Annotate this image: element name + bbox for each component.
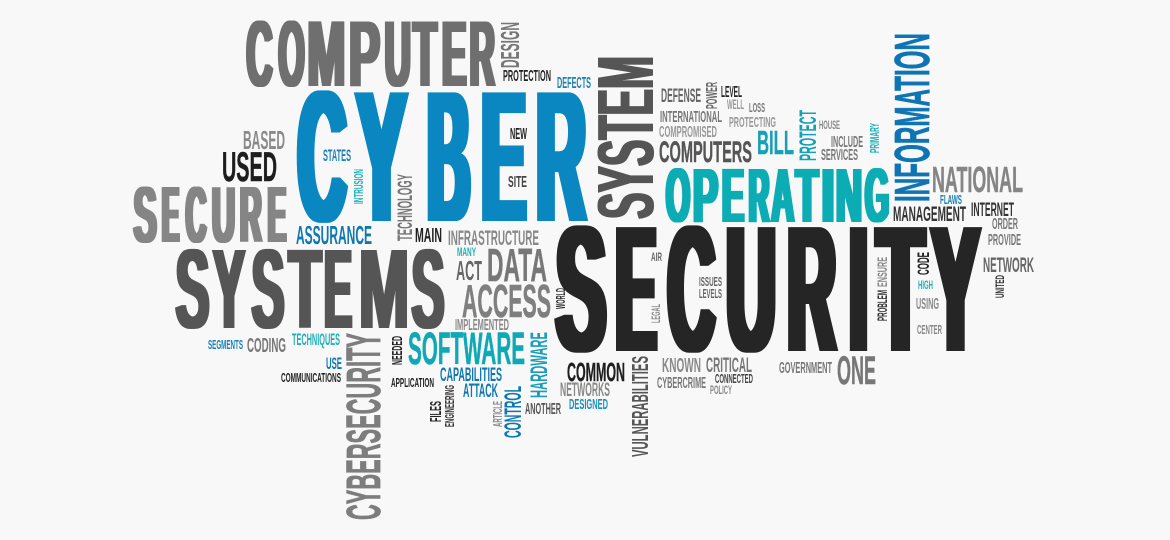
word: HIGH: HIGH: [918, 278, 933, 292]
word cloud: cyber security: PROVIDE: [988, 232, 1021, 249]
word cloud: cyber security: ATTACK: [463, 381, 498, 402]
word cloud: cyber security: INTERNET: [971, 200, 1014, 221]
word cloud: cyber security: LEGAL: [649, 304, 663, 323]
word: SECURE: R: [240, 170, 262, 259]
word: COMPUTER: T: [413, 1, 437, 106]
word: OPERATING: R: [749, 153, 769, 239]
word: SECURITY: T: [877, 189, 924, 390]
word cloud: cyber security: MANAGEMENT: [893, 203, 966, 226]
word cloud: cyber security: INTERNATIONAL: [660, 109, 722, 126]
word cloud: cyber security: CAPABILITIES: [440, 365, 502, 386]
word cloud: cyber security: NETWORK: [983, 254, 1034, 277]
word: SYSTEMS: T: [288, 226, 322, 352]
word cloud: cyber security: NATIONAL: [932, 159, 1023, 200]
word cloud: cyber security: INCLUDE: [831, 134, 863, 151]
word: OPERATING: T: [796, 153, 818, 239]
word cloud: cyber security: BASED: [243, 125, 285, 155]
word cloud: cyber security: COMMUNICATIONS: [281, 370, 341, 385]
word cloud: cyber security: POLICY: [710, 383, 732, 397]
word cloud: cyber security: STATES: [323, 146, 351, 165]
word cloud: cyber security: INFRASTRUCTURE: [448, 227, 539, 250]
word cloud: cyber security: APPLICATION: [391, 375, 434, 390]
word cloud: cyber security: INTRUSION: [351, 169, 366, 204]
word cloud: cyber security: ASSURANCE: [296, 220, 372, 250]
word: SYSTEMS: S: [176, 226, 210, 352]
word: BILL: BILL: [757, 124, 794, 161]
word: CYBER: B: [428, 52, 470, 261]
word cloud: cyber security: R: [537, 52, 586, 261]
word cloud: cyber security: DEFECTS: [557, 75, 591, 92]
word cloud: cyber security: DESIGNED: [569, 396, 608, 413]
word cloud: cyber security: SEGMENTS: [208, 337, 243, 352]
word: SECURITY: U: [727, 189, 776, 390]
word cloud: cyber security: ONE: [837, 349, 876, 393]
word cloud: cyber security: PROTECTION: [503, 68, 551, 85]
word: SITE: SITE: [508, 174, 527, 191]
word cloud: cyber security: CODE: [914, 252, 933, 275]
word: SYSTEMS: S: [252, 226, 284, 352]
word cloud: cyber security: COMPUTERS: [659, 136, 752, 169]
word: SECURITY: S: [556, 189, 606, 390]
word cloud: cyber security: USING: [916, 296, 939, 313]
word cloud: cyber security: WORLD: [553, 288, 568, 309]
word: COMPUTER: C: [246, 1, 272, 106]
word cloud: cyber security: CYBERSECURITY: [338, 333, 391, 520]
word: OPERATING: O: [666, 153, 690, 239]
word cloud: cyber security: CONNECTED: [715, 371, 753, 386]
word cloud: cyber security: G: [865, 153, 889, 239]
word cloud: cyber security: TECHNOLOGY: [394, 174, 417, 241]
word: AIR: AIR: [651, 250, 662, 264]
word cloud: cyber security: SOFTWARE: [408, 323, 525, 374]
word: UNITED: UNITED: [993, 275, 1007, 298]
word cloud: cyber security: R: [470, 1, 495, 106]
word: SECURITY: E: [616, 189, 656, 390]
word: OPERATING: E: [722, 153, 744, 239]
word cloud: cyber security: COMPROMISED: [659, 124, 717, 141]
word cloud: cyber security: LOSS: [749, 100, 765, 115]
word cloud: cyber security: ARTICLE: [490, 401, 505, 427]
word: OPERATING: N: [836, 153, 862, 239]
word cloud: cyber security: FILES: [428, 401, 445, 422]
word: MANY: MANY: [457, 245, 476, 259]
word: MAIN: MAIN: [415, 225, 442, 247]
word: KNOWN: KNOWN: [662, 355, 701, 377]
word: CYBER: C: [298, 52, 346, 261]
word: COMPUTER: P: [349, 1, 380, 106]
word cloud: cyber security: FLAWS: [940, 192, 962, 207]
word cloud: cyber security: CRITICAL: [706, 354, 752, 377]
word: SYSTEMS: M: [359, 226, 409, 352]
word cloud: cyber security: ANOTHER: [525, 401, 561, 418]
word cloud: cyber security: ACT: [456, 255, 482, 286]
word cloud: cyber security: PROTECT: [795, 110, 822, 161]
word cloud: cyber security: Y: [932, 189, 980, 390]
word cloud: cyber security: S: [412, 226, 444, 352]
word cloud: cyber security: DATA: [487, 239, 547, 291]
word cloud: cyber security: USED: [222, 143, 277, 190]
word: CYBER: Y: [356, 52, 406, 261]
word: COMPUTER: U: [385, 1, 411, 106]
word cloud: cyber security: CONTROL: [500, 386, 527, 438]
word cloud: cyber security: DEFENSE: [661, 86, 701, 107]
word: OPERATING: P: [693, 153, 718, 239]
word: SYSTEMS: E: [324, 226, 352, 352]
word cloud: cyber security: CYBERCRIME: [657, 375, 706, 392]
word: ENSURE: ENSURE: [874, 257, 890, 287]
word cloud: cyber security: VULNERABILITIES: [627, 356, 653, 457]
word cloud: cyber security: LEVEL: [721, 84, 742, 101]
word cloud: cyber security: PROBLEM: [874, 290, 890, 321]
word: SECURITY: C: [668, 189, 715, 390]
word cloud: cyber security: ACCESS: [462, 275, 551, 327]
word cloud: cyber security: NETWORKS: [560, 380, 610, 401]
word cloud: cyber security: ISSUES: [699, 274, 722, 289]
word cloud: cyber security: WELL: [727, 96, 744, 112]
word: SECURITY: R: [788, 189, 836, 390]
word: COMPUTER: M: [307, 1, 345, 106]
word: SECURE: C: [186, 170, 206, 259]
word: CYBER: E: [482, 52, 526, 261]
word: SECURE: E: [162, 170, 179, 259]
word cloud: cyber security: NEW: [510, 126, 527, 143]
word: SECURE: S: [134, 170, 157, 259]
word cloud: cyber security: E: [268, 170, 286, 259]
word cloud: cyber security: SERVICES: [821, 147, 858, 164]
word: SECURE: U: [212, 170, 235, 259]
word: OPERATING: I: [821, 153, 835, 239]
word: OPERATING: A: [772, 153, 794, 239]
word: COMPUTER: E: [442, 1, 466, 106]
word cloud: cyber security: HOUSE: [819, 118, 840, 132]
word cloud: cyber security: USE: [326, 354, 342, 373]
word cloud: cyber security: ENGINEERING: [442, 385, 457, 427]
word cloud: cyber security: CODING: [247, 335, 286, 357]
word cloud: cyber security: POWER: [704, 82, 721, 109]
word cloud: cyber security: HARDWARE: [526, 332, 553, 398]
word: SECURITY: I: [850, 189, 868, 390]
word cloud: cyber security: COMMON: [567, 357, 625, 387]
word cloud: cyber security: CENTER: [917, 322, 942, 337]
word: COMPUTER: O: [278, 1, 304, 106]
word cloud: cyber security: TECHNIQUES: [292, 330, 340, 349]
word cloud: cyber security: GOVERNMENT: [779, 360, 832, 377]
word cloud: cyber security: ORDER: [992, 216, 1018, 233]
word cloud: cyber security: LEVELS: [699, 286, 722, 301]
word cloud: cyber security: IMPLEMENTED: [455, 317, 509, 334]
word cloud: cyber security: NEEDED: [389, 336, 406, 365]
word: PRIMARY: PRIMARY: [867, 123, 882, 153]
word: SYSTEMS: Y: [213, 226, 245, 352]
word cloud: cyber security: PROTECTING: [729, 114, 776, 131]
